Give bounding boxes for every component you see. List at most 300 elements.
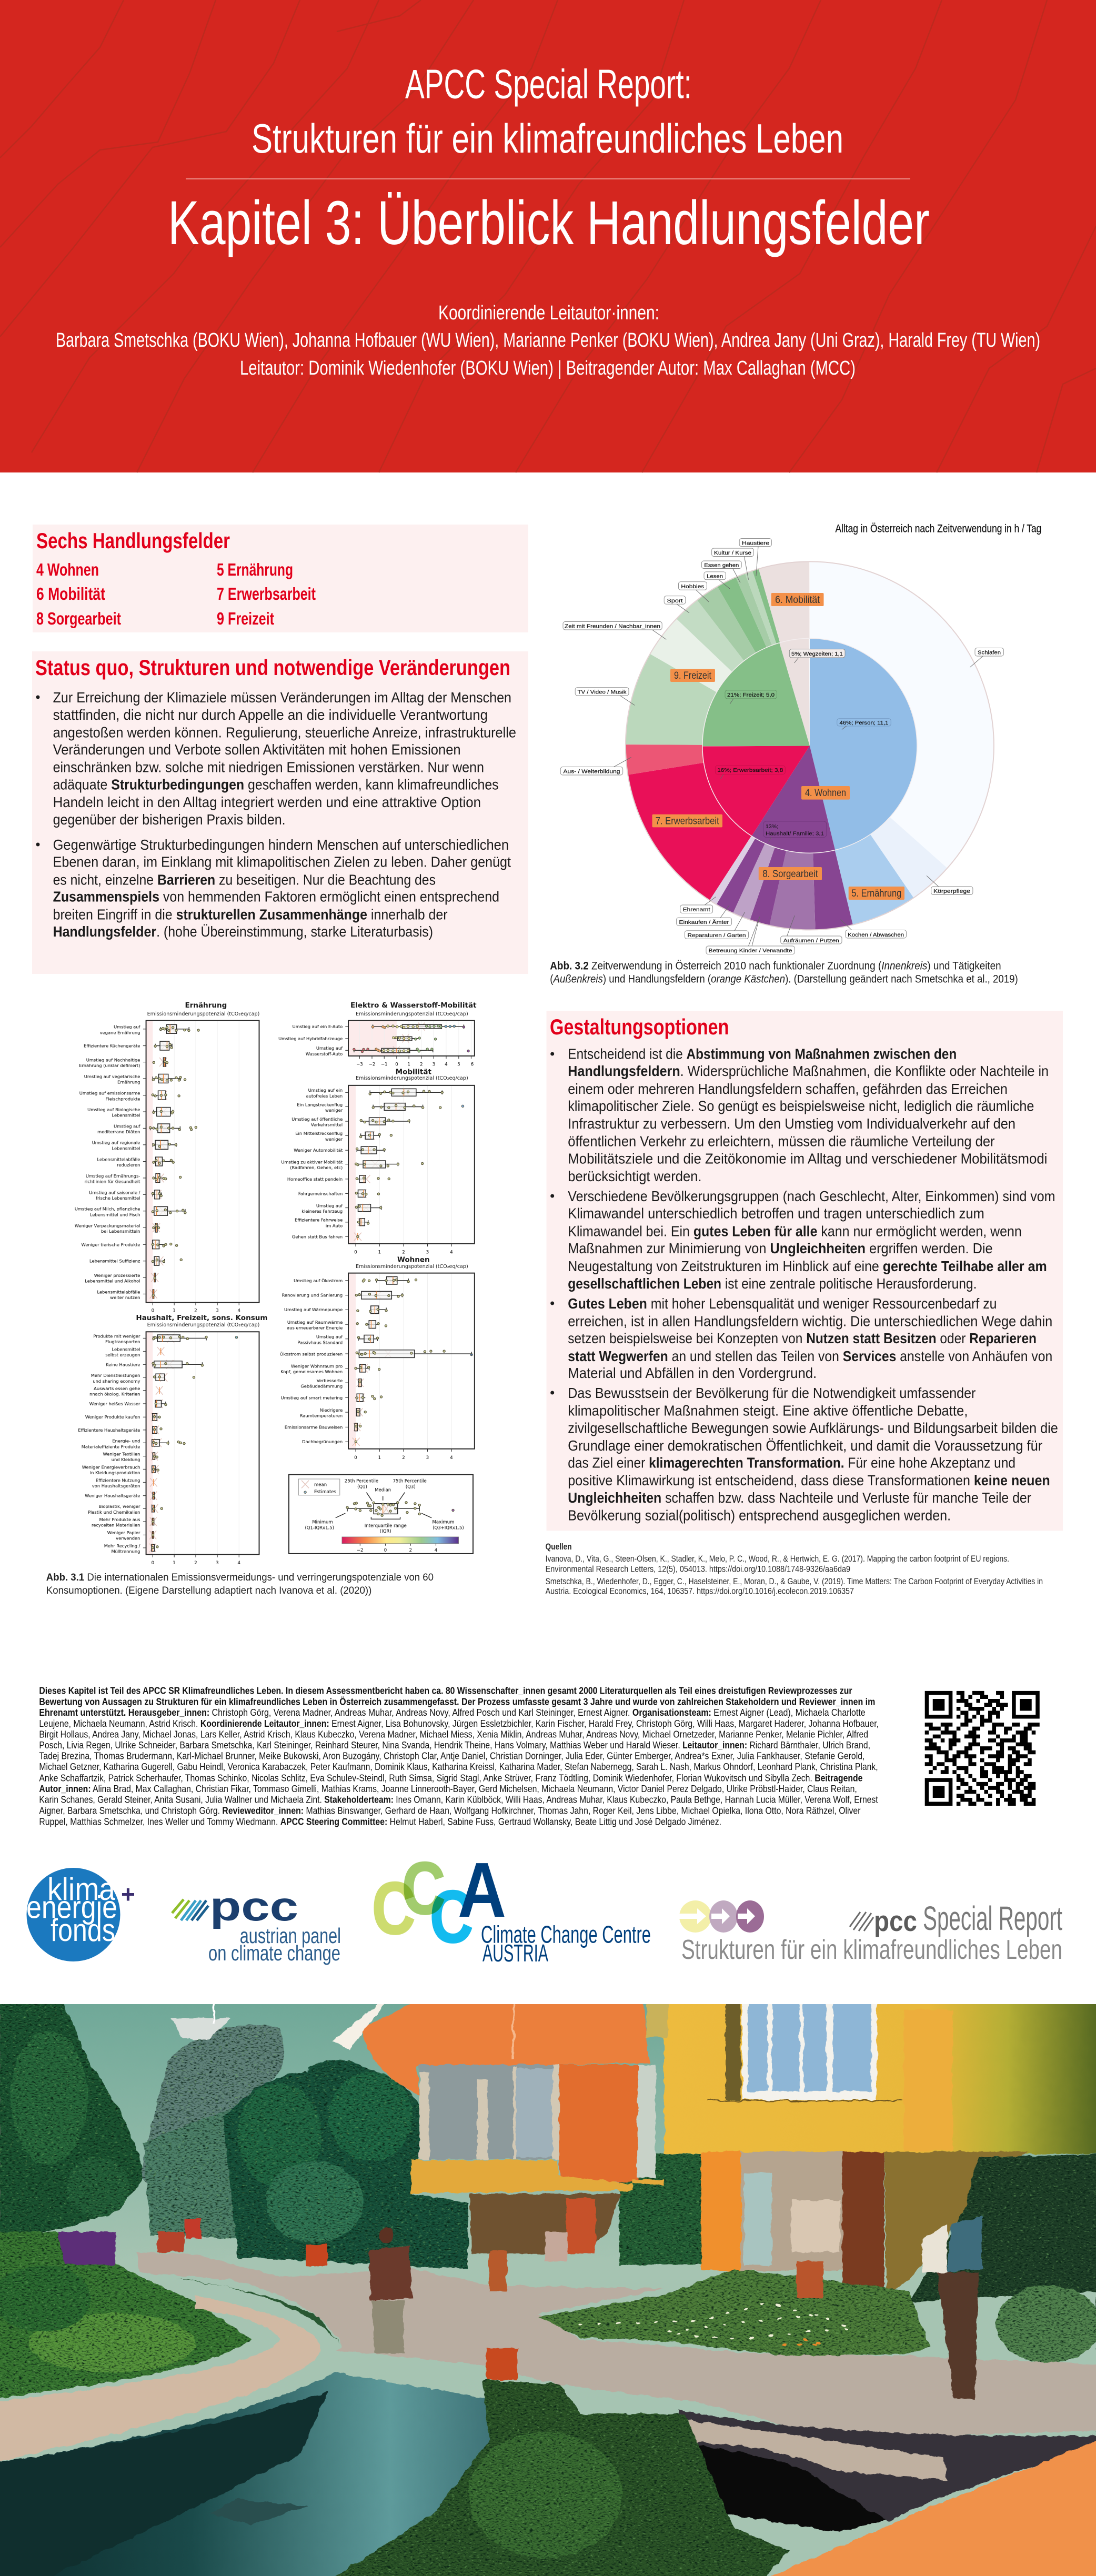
orange field tags: 8. Sorgearbeit — [762, 869, 818, 880]
chart: Haushalt, Freizeit, sons. Konsum: Haushalt, Freizeit, sons. Konsum — [136, 1314, 267, 1322]
sources: Environmental Research Letters, 12(5), 054013. https://doi.org/10.1088/1748-9326/aa6da9 — [546, 1564, 850, 1574]
list of fields: 4 Wohnen — [36, 560, 99, 579]
chart: Elektro und Wasserstoff-Mobilität: Umstieg auf Hybridfahrzeuge — [278, 1036, 343, 1041]
chart: Ernährung: bei Lebensmitteln — [101, 1229, 140, 1234]
chart: Mobilität: kleineres Fahrzeug — [301, 1209, 343, 1214]
chart: Mobilität: weniger — [325, 1136, 343, 1142]
chart: Haushalt, Freizeit, sons. Konsum: Weniger Energieverbrauch — [82, 1465, 140, 1470]
inner circle labels: 13%; — [766, 823, 778, 830]
text: Gestaltungsoptionen bullets: klimapolitischer Maßnahmen steigt. Eine aktive öffentliche Debatte, — [568, 1402, 968, 1418]
text: status quo bullets: einschränken bzw. solche mit niedrigen Emissionen verstärken. Nur wenn — [53, 759, 484, 775]
text: status quo bullets — [36, 689, 516, 940]
logo: Climate Change Centre Austria: AUSTRIA — [482, 1939, 548, 1967]
authors block: Koordinierende Leitautor·innen: — [438, 302, 659, 324]
chart: Ernährung: Umstieg auf — [114, 1123, 140, 1129]
chart: Elektro und Wasserstoff-Mobilität: 0 — [395, 1062, 398, 1067]
bridge — [580, 2413, 894, 2532]
chart: Ernährung: 1 — [173, 1308, 176, 1313]
sources: Quellen — [546, 1542, 572, 1552]
chart: Ernährung: Ernährung — [117, 1080, 140, 1085]
list of fields: 7 Erwerbsarbeit — [217, 584, 316, 603]
logo: SR arrows — [679, 1900, 764, 1933]
orange field tags: 5. Ernährung — [851, 888, 901, 899]
text: Gestaltungsoptionen bullets: setzen beispielsweise bei Konzepten von Nutzen statt Besitzen oder Reparieren — [568, 1330, 1037, 1346]
text: status quo bullets: Gegenwärtige Strukturbedingungen hindern Menschen auf unterschiedlichen — [53, 837, 509, 853]
chart: Haushalt, Freizeit, sons. Konsum: Mülltrennung — [111, 1549, 140, 1554]
activity labels: Körperpflege — [933, 888, 970, 894]
chart: Haushalt, Freizeit, sons. Konsum: Weniger Haushaltsgeräte — [85, 1493, 140, 1498]
chart: Elektro und Wasserstoff-Mobilität: Elektro & Wasserstoff-Mobilität — [350, 1001, 477, 1010]
chart: Haushalt, Freizeit, sons. Konsum: Weniger Papier — [107, 1530, 140, 1535]
text: status quo bullets: stattfinden, die nicht nur durch Appelle an die individuelle Verantwortung — [53, 707, 488, 723]
chart: Ernährung: Fleischprodukte — [106, 1096, 140, 1101]
text: status quo bullets: gegenüber der bisherigen Praxis bilden. — [53, 811, 286, 828]
chart: Elektro und Wasserstoff-Mobilität: −2 — [369, 1062, 375, 1067]
chart: Ernährung: Lebensmittel — [112, 1145, 140, 1151]
chart: Elektro und Wasserstoff-Mobilität: 6 — [471, 1062, 474, 1067]
legend: boxplot explanation: Estimates — [314, 1490, 337, 1495]
chart: Haushalt, Freizeit, sons. Konsum: Effizientere Haushaltsgeräte — [78, 1427, 140, 1433]
inner circle labels: 5%; Wegzeiten; 1,1 — [791, 651, 843, 657]
caption Abb. 3.1: Konsumoptionen. (Eigene Darstellung adaptiert nach Ivanova et al. (2020)) — [46, 1585, 371, 1596]
activity labels — [560, 539, 1003, 954]
text: status quo bullets: Zur Erreichung der Klimaziele müssen Veränderungen im Alltag der Menschen — [53, 689, 511, 706]
orange field tags: 4. Wohnen — [805, 788, 846, 799]
caption Abb. 3.1 — [46, 1572, 434, 1596]
water — [0, 2373, 489, 2576]
legend: boxplot explanation: (IQR) — [380, 1529, 391, 1534]
caption Abb. 3.2 — [550, 960, 1018, 985]
chart: Ernährung: reduzieren — [117, 1162, 140, 1168]
text: Gestaltungsoptionen bullets: Klimawandel unterschiedlich betroffen und tragen unterschiedlich zum — [568, 1205, 984, 1222]
panel: sechs Handlungsfelder — [33, 525, 528, 632]
chart: Ernährung: Umstieg auf — [114, 1024, 140, 1030]
activity labels: Reparaturen / Garten — [687, 932, 746, 939]
chart: Wohnen: Umstieg auf Raumwärme — [287, 1320, 343, 1325]
credits text block: Anke Schaffartzik, Patrick Scherhaufer, Thomas Schinko, Nicolas Schlitz, Eva Schulev-Steindl, Ruth Simsa, Sigrid Stagl, Anke Strüver, Franz Tödtling, Dominik Wiedenhofer, Florian Wukovitsch und Sibylla Zech. Beitragende — [39, 1773, 862, 1783]
logo: apcc austrian panel on climate change: austrian panel — [240, 1924, 341, 1948]
chart: Wohnen: Gebäudedämmung — [300, 1384, 343, 1389]
chart: Ernährung — [75, 1001, 259, 1313]
chart: Mobilität: im Auto — [326, 1223, 343, 1228]
chart: Ernährung: Weniger prozessierte — [94, 1273, 140, 1278]
chart title: Alltag in Österreich nach Zeitverwendung in h / Tag — [836, 523, 1041, 535]
text: Gestaltungsoptionen bullets: Handlungsfeldern. Widersprüchliche Maßnahmen, die Konflikte oder Nachteile in — [568, 1063, 1049, 1079]
text: Gestaltungsoptionen bullets: Klimawandel bei. Ein gutes Leben für alle kann nur ermöglicht werden, wenn — [568, 1223, 1022, 1240]
chart: Ernährung: Umstieg auf vegetarische — [84, 1074, 140, 1079]
text: status quo bullets: adäquate Strukturbedingungen geschaffen werden, kann klimafreundliches — [53, 777, 499, 793]
text: Gestaltungsoptionen bullets: zivilgesellschaftliche Bewegungen sowie Aufklärungs- und Bildungsarbeit bilden die — [568, 1420, 1058, 1436]
list of fields: 9 Freizeit — [217, 609, 274, 628]
chart: Mobilität: Effizientere Fahrweise — [295, 1217, 343, 1223]
chart: Wohnen: Verbesserte — [317, 1378, 343, 1383]
chart: Ernährung: Umstieg auf saisonale / — [89, 1190, 140, 1195]
chart: Ernährung: Umstieg auf Milch, pflanzliche — [75, 1206, 140, 1212]
chart: Mobilität: autofreies Leben — [306, 1093, 343, 1099]
chart: Elektro und Wasserstoff-Mobilität: Wasserstoff-Auto — [306, 1051, 343, 1056]
chart: Haushalt, Freizeit, sons. Konsum: Mehr Produkte aus — [99, 1517, 140, 1522]
chart: Haushalt, Freizeit, sons. Konsum: 1 — [173, 1561, 176, 1566]
chart: Ernährung: richtlinien für Gesundheit — [85, 1179, 140, 1184]
illustration: neighbourhood scene — [0, 2001, 1096, 2576]
title: Strukturen für ein klimafreundliches Leben — [252, 115, 843, 162]
chart: Elektro und Wasserstoff-Mobilität: Umstieg auf ein E-Auto — [293, 1024, 343, 1029]
chart: Wohnen: Niedrigere — [320, 1407, 343, 1413]
chart: Ernährung: Umstieg auf Ernährungs- — [86, 1173, 140, 1179]
chart: Wohnen: Umstieg auf Wärmepumpe — [284, 1307, 343, 1312]
chart: Mobilität: Ein Mittelstreckenflug — [295, 1131, 343, 1136]
legend: boxplot explanation: 75th Percentile — [393, 1478, 427, 1484]
title: APCC Special Report: — [405, 61, 692, 107]
chart: Wohnen: 3 — [426, 1455, 429, 1461]
chart: Ernährung: Lebensmittelabfälle — [97, 1156, 140, 1162]
chart: Mobilität: Umstieg auf öffentliche — [291, 1116, 343, 1122]
logo: Klima- und Energiefonds: fonds — [51, 1913, 115, 1948]
activity labels: Lesen — [707, 573, 723, 580]
chart: Elektro und Wasserstoff-Mobilität: 1 — [407, 1062, 410, 1067]
logo: Climate Change Centre Austria: A — [458, 1847, 506, 1934]
text: Gestaltungsoptionen bullets: Gutes Leben mit hoher Lebensqualität und weniger Ressourcenbedarf zu — [568, 1295, 997, 1312]
chart: Haushalt, Freizeit, sons. Konsum: Weniger Textilien — [103, 1452, 140, 1457]
chart: Ernährung: Lebensmittel und Fisch — [90, 1212, 140, 1217]
logo: Climate Change Centre Austria: C — [402, 1847, 445, 1929]
yellow house — [664, 2001, 1096, 2154]
chart: Haushalt, Freizeit, sons. Konsum: und sharing economy — [93, 1378, 140, 1384]
activity labels: Aufräumen / Putzen — [783, 938, 839, 944]
text: Gestaltungsoptionen bullets: Maßnahmen zur Minimierung von Ungleichheiten ergriffen werden. Die — [568, 1240, 993, 1256]
caption Abb. 3.2: Abb. 3.2 Zeitverwendung in Österreich 2010 nach funktionaler Zuordnung (Innenkreis) und Tätigkeiten — [550, 960, 1001, 972]
chart: Haushalt, Freizeit, sons. Konsum: in Kleidungsproduktion — [90, 1470, 140, 1475]
legend: boxplot explanation: Minimum — [312, 1520, 333, 1525]
chart: Mobilität: Umstieg auf ein — [308, 1088, 343, 1093]
QR code — [925, 1691, 1040, 1806]
chart: Haushalt, Freizeit, sons. Konsum: Bioplastik, weniger — [98, 1504, 140, 1509]
caption Abb. 3.1: Abb. 3.1 Die internationalen Emissionsvermeidungs- und verringerungspotenziale von 60 — [46, 1572, 434, 1583]
chart: Mobilität: Umstieg auf — [316, 1203, 343, 1208]
logo: Klima- und Energiefonds: + — [121, 1880, 135, 1908]
activity labels: Essen gehen — [704, 562, 739, 568]
activity labels: TV / Video / Musik — [578, 689, 627, 696]
chart: Elektro und Wasserstoff-Mobilität: 5 — [457, 1062, 460, 1067]
chart: Haushalt, Freizeit, sons. Konsum: Keine Haustiere — [106, 1362, 140, 1367]
chart: Ernährung: Weniger Verpackungsmaterial — [75, 1223, 140, 1228]
credits text block: Aigner, Barbara Smetschka, und Christoph Görg. Revieweditor_innen: Mathias Binswanger, Gerhard de Haan, Wolfgang Hofkirchner, Thomas Jahn, Roger Keil, Jens Libbe, Michael Opielka, Ilona Otto, Nora Räthzel, Oliver — [39, 1805, 861, 1816]
legend: boxplot explanation: 0 — [384, 1548, 387, 1553]
chart: Haushalt, Freizeit, sons. Konsum: von Haushaltsgeräten — [92, 1483, 140, 1488]
heading: Status quo: Status quo, Strukturen und notwendige Veränderungen — [35, 655, 510, 680]
chart: Haushalt, Freizeit, sons. Konsum: Mehr Recycling / — [104, 1543, 140, 1548]
chart: Ernährung: vegane Ernährung — [100, 1030, 140, 1035]
text: Gestaltungsoptionen bullets: Ungleichheiten schaffen bzw. dass Nachteile und Verluste für manche Teile der — [568, 1490, 1031, 1506]
text: Gestaltungsoptionen bullets: gesellschaftlichen Leben ist eine zentrale politische Herausforderung. — [568, 1275, 977, 1292]
activity labels: Ehrenamt — [683, 907, 710, 913]
logo: apcc austrian panel on climate change: pcc — [210, 1883, 298, 1929]
orange field tags: 6. Mobilität — [775, 595, 820, 606]
title — [252, 61, 843, 162]
chart: Wohnen — [280, 1255, 475, 1461]
list of fields: 6 Mobilität — [36, 584, 105, 603]
activity labels: Aus- / Weiterbildung — [563, 768, 620, 774]
chart: Elektro und Wasserstoff-Mobilität: 4 — [445, 1062, 448, 1067]
chart: Ernährung: Weniger tierische Produkte — [81, 1242, 140, 1247]
chart: Wohnen: Emissionsminderungspotenzial (tCO₂eq/cap) — [356, 1264, 468, 1270]
chart: Ernährung: Ernährung (unklar definiert) — [79, 1063, 140, 1068]
icon: apcc striped mark — [172, 1899, 208, 1920]
logo: apcc Special Report: pcc — [874, 1905, 917, 1937]
legend: boxplot explanation: 4 — [435, 1548, 437, 1553]
text: status quo bullets: Zusammenspiels von hemmenden Faktoren ermöglicht einen entsprechend — [53, 889, 499, 905]
chart: Wohnen: Umstieg auf Ökostrom — [294, 1278, 343, 1283]
orange house — [364, 2001, 650, 2095]
logo: Climate Change Centre Austria: Climate Change Centre — [481, 1920, 651, 1948]
chart: Haushalt, Freizeit, sons. Konsum: recycelten Materialien — [92, 1523, 140, 1528]
chart: Ernährung: mediterrane Diäten — [97, 1129, 140, 1134]
text: Gestaltungsoptionen bullets: einem oder mehreren Handlungsfeldern schaffen, gefährden das Erreichen — [568, 1081, 1008, 1097]
credits text block: Birgit Hollaus, Andrea Jany, Michael Jonas, Lars Keller, Astrid Krisch, Klaus Kubeczko, Verena Madner, Michael Miess, Xenia Miklin, Andreas Muhar, Andreas Novy, Michael Ornetzeder, Marianne Penker, Melanie Pichler, Alfred — [39, 1729, 868, 1739]
chart: Mobilität: Homeoffice statt pendeln — [287, 1176, 343, 1182]
logo: apcc austrian panel on climate change — [172, 1883, 341, 1965]
chart: Haushalt, Freizeit, sons. Konsum: 0 — [152, 1561, 154, 1566]
orange field tags — [652, 593, 904, 900]
text: status quo bullets: Veränderungen und Verbote sollen Aktivitäten mit hohen Emissionen — [53, 741, 461, 758]
chart: Haushalt, Freizeit, sons. Konsum: Effizientere Nutzung — [96, 1477, 140, 1483]
inner circle labels: Haushalt/ Familie; 3,1 — [766, 830, 824, 837]
credits text block: Autor_innen: Alina Brad, Max Callaghan, Christian Fikar, Tommaso Gimelli, Mathias Krams, Joanne Linnerooth-Bayer, Gerd Michelsen, Michaela Neumann, Victor Daniel Perez Delgado, Ulrike Pröbstl-Haider, Claus Reitan, — [39, 1784, 857, 1794]
text: Gestaltungsoptionen bullets — [550, 1046, 1058, 1523]
text: Gestaltungsoptionen bullets: erreichen, ist in allen Handlungsfeldern wichtig. Die unterschiedlichen Wege dahin — [568, 1313, 1052, 1330]
text: Gestaltungsoptionen bullets: Material und Abfällen in den Vordergrund. — [568, 1365, 817, 1381]
chart: Ernährung: weiter nutzen — [110, 1295, 140, 1300]
legend: boxplot explanation: 2 — [409, 1548, 412, 1553]
chart: Haushalt, Freizeit, sons. Konsum: Plastik und Chemikalien — [88, 1510, 140, 1515]
right garden — [538, 2269, 930, 2356]
logo: Climate Change Centre Austria: C — [372, 1867, 415, 1949]
chart: Haushalt, Freizeit, sons. Konsum: Emissionsminderungspotenzial (tCO₂eq/cap) — [147, 1322, 259, 1328]
chart: Elektro und Wasserstoff-Mobilität: Umstieg auf — [316, 1045, 343, 1051]
legend: boxplot explanation: 25th Percentile — [345, 1478, 378, 1484]
chart: Ernährung: Emissionsminderungspotenzial (tCO₂eq/cap) — [147, 1011, 259, 1017]
chart: Wohnen: Emissionsarme Bauweisen — [285, 1424, 343, 1430]
sources — [546, 1542, 1043, 1596]
credits text block: Tadej Brezina, Thomas Brudermann, Karl-Michael Brunner, Meike Bukowski, Aron Buzogány, Christoph Clar, Antje Daniel, Christian Dorninger, Julia Eder, Günter Emberger, Andrea*s Exner, Julia Fankhauser, Stefanie Gerold, — [39, 1750, 864, 1761]
authors block — [56, 302, 1040, 379]
chart: Haushalt, Freizeit, sons. Konsum: und Kleidung — [112, 1457, 140, 1462]
chart: Elektro und Wasserstoff-Mobilität: 2 — [420, 1062, 423, 1067]
logo: Klima- und Energiefonds — [26, 1868, 135, 1961]
chart: Mobilität: 4 — [450, 1250, 453, 1255]
orange field tags: 9. Freizeit — [674, 670, 712, 681]
legend: boxplot explanation: −2 — [357, 1548, 364, 1553]
sources: Ivanova, D., Vita, G., Steen-Olsen, K., Stadler, K., Melo, P. C., Wood, R., & Hertwich, E. G. (2017). Mapping the carbon footprint of EU regions. — [546, 1554, 1009, 1564]
activity labels: Zeit mit Freunden / Nachbar_innen — [565, 623, 660, 629]
chart: Mobilität: weniger — [325, 1108, 343, 1113]
list of fields: 5 Ernährung — [217, 560, 293, 579]
chart: Ernährung: Lebensmittelabfälle — [97, 1289, 140, 1294]
list of fields: 8 Sorgearbeit — [36, 609, 121, 628]
chart: Elektro und Wasserstoff-Mobilität: 3 — [433, 1062, 435, 1067]
chart: Ernährung: frische Lebensmittel — [96, 1195, 140, 1201]
credits text block: Michael Getzner, Katharina Gugerell, Gabu Heindl, Veronica Karabaczek, Peter Kaufmann, Dominik Klaus, Katharina Kreissl, Katharina Mader, Stefan Nabernegg, Sarah L. Nash, Markus Ohndorf, Leonhard Plank, Christina Plank, — [39, 1762, 878, 1772]
panel: Gestaltungsoptionen — [546, 1011, 1063, 1531]
chart: Haushalt, Freizeit, sons. Konsum: Energie- und — [112, 1438, 140, 1444]
logo: Climate Change Centre Austria — [372, 1847, 651, 1967]
chart: Haushalt, Freizeit, sons. Konsum: nnach ökolog. Kriterien — [89, 1392, 140, 1397]
chart: Ernährung: Umstieg auf regionale — [92, 1140, 140, 1145]
chart: Wohnen: 2 — [402, 1455, 405, 1461]
chart: Haushalt, Freizeit, sons. Konsum — [78, 1314, 267, 1566]
text: Gestaltungsoptionen bullets: Mobilitätsziele und die Zeitökonomie im Alltag und verschiedener Mobilitätsmodi — [568, 1150, 1047, 1166]
chart: Wohnen: Raumtemperaturen — [300, 1413, 343, 1418]
credits text block: Karin Schanes, Gerald Steiner, Anita Susani, Julia Wallner und Michaela Zint. Stakeholderteam: Ines Omann, Karin Küblböck, Willi Haas, Andreas Muhar, Klaus Kubeczko, Paula Bethge, Hannah Lucia Müller, Verena Wolf, Ernest — [39, 1794, 878, 1805]
chart: Ernährung: Ernährung — [185, 1001, 227, 1010]
chart: Ernährung: Lebensmittel — [112, 1113, 140, 1118]
activity labels: Haustiere — [742, 540, 769, 546]
chart: Wohnen: aus erneuerbarer Energie — [287, 1325, 343, 1331]
chart: Wohnen: Weniger Wohnraum pro — [291, 1364, 343, 1369]
chart: Elektro und Wasserstoff-Mobilität — [278, 1001, 477, 1067]
ground floor — [701, 2152, 741, 2271]
legend: boxplot explanation: Maximum — [433, 1520, 454, 1525]
legend: boxplot explanation: (Q3+IQRx1.5) — [433, 1525, 464, 1531]
legend: boxplot explanation: (Q3) — [406, 1484, 416, 1490]
foreground foliage — [328, 2380, 790, 2576]
chart: Mobilität: (Radfahren, Gehen, etc) — [290, 1165, 343, 1170]
activity labels: Betreuung Kinder / Verwandte — [708, 948, 792, 954]
legend: boxplot explanation: Interquartile range — [365, 1524, 407, 1529]
chart: Haushalt, Freizeit, sons. Konsum: 3 — [216, 1561, 219, 1566]
icon: grey striped mark — [850, 1912, 873, 1931]
chart: Wohnen: 0 — [354, 1455, 357, 1461]
chart: Mobilität — [281, 1068, 475, 1255]
gondola — [171, 2018, 230, 2039]
chart: Haushalt, Freizeit, sons. Konsum: Mehr Dienstleistungen — [91, 1373, 140, 1378]
chart: Wohnen: Passivhaus Standard — [297, 1340, 343, 1345]
text: status quo bullets: angestoßen werden können. Regulierung, steuerliche Anreize, infrastrukturelle — [53, 724, 516, 740]
chart: Haushalt, Freizeit, sons. Konsum: Lebensmittel — [112, 1346, 140, 1352]
text: Gestaltungsoptionen bullets: Bevölkerung sozial(politisch) entsprechend ausgeglichen werden. — [568, 1507, 951, 1523]
credits text block: Ehrenamt unterstützt. Herausgeber_innen: Christoph Görg, Verena Madner, Andreas Muhar, Andreas Novy, Alfred Posch und Karl Steininger, Ernest Aigner. Organisationsteam: Ernest Aigner (Lead), Michaela Charlotte — [39, 1707, 866, 1718]
walkway — [136, 2252, 1096, 2439]
chart: Haushalt, Freizeit, sons. Konsum: 4 — [237, 1561, 240, 1566]
chart: Mobilität: Emissionsminderungspotenzial (tCO₂eq/cap) — [356, 1075, 468, 1081]
heading: Sechs Handlungsfelder: Sechs Handlungsfelder — [36, 528, 230, 553]
text: Gestaltungsoptionen bullets: das Ziel einer klimagerechten Transformation. Für eine hohe Akzeptanz und — [568, 1455, 1015, 1471]
logo: Klima- und Energiefonds: energie — [26, 1890, 117, 1925]
orange field tags: 7. Erwerbsarbeit — [656, 816, 719, 827]
panel: status quo — [32, 651, 528, 974]
chart: Mobilität: 1 — [378, 1250, 381, 1255]
outer ring: activities — [664, 600, 956, 891]
chart: Wohnen: Umstieg auf smart metering — [281, 1395, 343, 1401]
chart: Elektro und Wasserstoff-Mobilität: −3 — [356, 1062, 363, 1067]
chart: Ernährung: 3 — [216, 1308, 219, 1313]
text: status quo bullets: es nicht, einzelne Barrieren zu beseitigen. Nur die Beachtung des — [53, 871, 436, 888]
chart: Mobilität: Weniger Automobilität — [294, 1148, 343, 1153]
logo: Climate Change Centre Austria: C — [430, 1875, 473, 1958]
chart: Haushalt, Freizeit, sons. Konsum: Weniger Produkte kaufen — [85, 1414, 140, 1420]
chart: Mobilität: Ein Langstreckenflug — [297, 1102, 343, 1107]
chart: Haushalt, Freizeit, sons. Konsum: Produkte mit weniger — [93, 1333, 140, 1339]
authors block: Leitautor: Dominik Wiedenhofer (BOKU Wien) | Beitragender Autor: Max Callaghan (MCC) — [240, 357, 856, 379]
text: status quo bullets: breiten Eingriff in die strukturellen Zusammenhänge innerhalb der — [53, 906, 448, 923]
legend: boxplot explanation — [289, 1475, 473, 1554]
credits text block: Posch, Livia Regen, Ulrike Schneider, Barbara Smetschka, Karl Steininger, Reinhard Steurer, Nina Svanda, Hendrik Theine, Hans Volmary, Matthias Weber und Harald Wieser. Leitautor_innen: Richard Bärnthaler, Ulrich Brand, — [39, 1740, 870, 1750]
left garden — [0, 2231, 252, 2399]
activity labels: Schlafen — [978, 649, 1001, 656]
credits text block: Bewertung von Aussagen zu Strukturen für ein klimafreundliches Leben in Österreich zusammengefasst. Der Prozess umfasste gesamt 3 Jahre und wurde von zahlreichen Stakeholdern und Reviewer_innen im — [39, 1696, 875, 1707]
credits text block: Leujene, Michaela Neumann, Astrid Krisch. Koordinierende Leitautor_innen: Ernest Aigner, Lisa Bohunovsky, Jürgen Essletzbichler, Karin Fischer, Harald Frey, Christoph Görg, Willi Haas, Margaret Haderer, Johanna Hofbauer, — [39, 1718, 879, 1729]
chart: Mobilität: 2 — [402, 1250, 405, 1255]
chart: Ernährung: Lebensmittel Suffizienz — [89, 1259, 140, 1264]
figure 3.1: boxplot panels — [46, 1001, 477, 1596]
logo: apcc Special Report — [681, 1899, 1062, 1965]
text: Gestaltungsoptionen bullets: statt Wegwerfen an und stellen das Teilen von Services anstelle von Anhäufen von — [568, 1348, 1052, 1364]
legend: boxplot explanation: (Q1-IQRx1.5) — [305, 1525, 334, 1531]
list of fields — [36, 560, 316, 628]
chart: Ernährung: 2 — [194, 1308, 197, 1313]
activity labels: Kochen / Abwaschen — [848, 932, 904, 938]
text: Gestaltungsoptionen bullets: berücksichtigt werden. — [568, 1168, 702, 1184]
activity labels: Einkaufen / Ämter — [679, 919, 729, 925]
background trees — [0, 2001, 703, 2269]
chart: Wohnen: Umstieg auf — [316, 1334, 343, 1340]
credits text block — [39, 1685, 879, 1827]
legend: boxplot explanation: mean — [314, 1482, 327, 1487]
inner circle labels: 16%; Erwerbsarbeit; 3,8 — [717, 767, 783, 773]
chart: Mobilität: 0 — [354, 1250, 357, 1255]
chart: Wohnen: Renovierung und Sanierung — [282, 1293, 343, 1298]
chart: Haushalt, Freizeit, sons. Konsum: 2 — [194, 1561, 197, 1566]
chart: Wohnen: Dachbegrünungen — [302, 1439, 343, 1444]
activity labels: Hobbies — [681, 583, 704, 590]
chart: Wohnen: Ökostrom selbst produzieren — [280, 1351, 343, 1356]
activity labels: Kultur / Kurse — [714, 550, 751, 556]
chart: Mobilität: Mobilität — [396, 1068, 431, 1076]
text: Gestaltungsoptionen bullets: klimapolitischer Ziele. So genügt es beispielsweise nicht, lediglich die räumliche — [568, 1098, 1034, 1114]
text: Gestaltungsoptionen bullets: positive Klimawirkung ist entscheidend, dass diese Transformationen keine neuen — [568, 1472, 1050, 1488]
chart: Ernährung: 4 — [237, 1308, 240, 1313]
sources: Austria. Ecological Economics, 164, 106357. https://doi.org/10.1016/j.ecolecon.2019.106357 — [546, 1586, 854, 1596]
chart: Wohnen: 4 — [450, 1455, 453, 1461]
chart: Wohnen: Kopf, gemeinsames Wohnen — [280, 1369, 343, 1374]
chart: Haushalt, Freizeit, sons. Konsum: Auswärts essen gehe — [94, 1386, 140, 1391]
legend: boxplot explanation: Median — [375, 1488, 391, 1493]
people — [185, 2217, 982, 2399]
chart: Haushalt, Freizeit, sons. Konsum: Flugtransporten — [105, 1339, 140, 1344]
activity labels: Sport — [667, 598, 683, 604]
chart: Ernährung: 0 — [152, 1308, 154, 1313]
chart: Mobilität: Gehen statt Bus fahren — [292, 1234, 343, 1239]
chart: Ernährung: Umstieg auf emissionsarme — [79, 1091, 140, 1096]
text: Gestaltungsoptionen bullets: öffentlichen Verkehr zu erleichtern, müssen die räumliche Verteilung der — [568, 1133, 994, 1150]
chart: Wohnen: Wohnen — [397, 1255, 430, 1264]
chart: Ernährung: Lebensmittel und Alkohol — [85, 1279, 140, 1284]
chart: Mobilität: Fahrgemeinschaften — [298, 1191, 343, 1196]
text: status quo bullets: Handlungsfelder. (hohe Übereinstimmung, starke Literaturbasis) — [53, 923, 433, 940]
chart: Haushalt, Freizeit, sons. Konsum: selbst erzeugen — [105, 1352, 140, 1357]
chart: Elektro und Wasserstoff-Mobilität: −1 — [381, 1062, 388, 1067]
chart: Ernährung: Umstieg auf Biologische — [87, 1107, 140, 1112]
chart: Mobilität: 3 — [426, 1250, 429, 1255]
heading: Gestaltungsoptionen: Gestaltungsoptionen — [550, 1014, 729, 1039]
right-side foliage — [0, 2154, 1096, 2399]
text: status quo bullets: Handeln leicht in den Alltag integriert werden und eine attraktive Option — [53, 794, 481, 810]
text: Gestaltungsoptionen bullets: Grundlage einer demokratischen Öffentlichkeit, und damit die Voraussetzung für — [568, 1437, 1042, 1454]
inner circle labels: 46%; Person; 11,1 — [840, 720, 889, 726]
text: Gestaltungsoptionen bullets: Das Bewusstsein der Bevölkerung für die Notwendigkeit umfassender — [568, 1385, 976, 1401]
header banner — [0, 0, 1096, 472]
caption Abb. 3.2: (Außenkreis) und Handlungsfeldern (orange Kästchen). (Darstellung geändert nach Smetschka et al., 2019) — [550, 973, 1018, 985]
